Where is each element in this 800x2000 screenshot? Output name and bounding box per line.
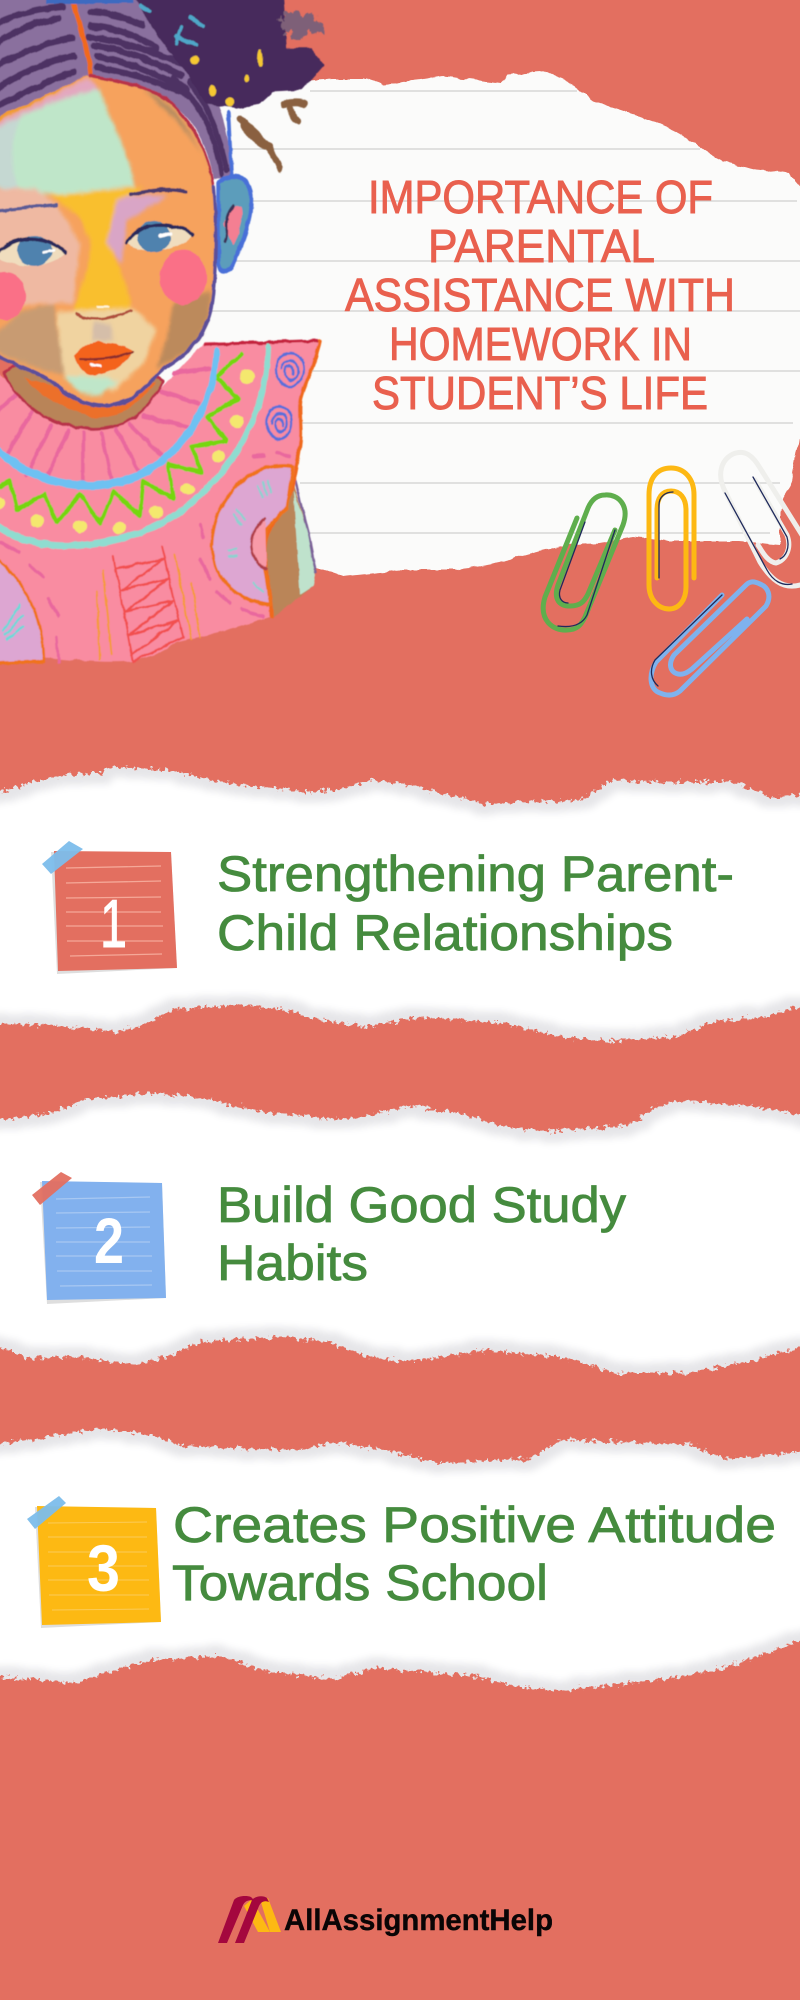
panel: torn strip 3 bbox=[0, 1429, 800, 1691]
panel: torn strip 2 bbox=[0, 1093, 800, 1373]
right clock patch bbox=[212, 465, 293, 605]
sleeve bbox=[260, 473, 316, 618]
ear bbox=[218, 177, 251, 272]
collar rays bbox=[0, 369, 210, 484]
tape bbox=[42, 841, 83, 874]
tape bbox=[32, 1172, 72, 1205]
title: IMPORTANCE OF bbox=[368, 171, 713, 223]
red scribble bbox=[113, 546, 183, 661]
icon: paperclips bbox=[543, 452, 800, 695]
sticky note 1 bbox=[42, 841, 177, 974]
green zigzag bbox=[0, 353, 242, 523]
title bbox=[345, 171, 735, 419]
face paint patches bbox=[0, 77, 211, 396]
lips bbox=[74, 341, 134, 375]
step 2 text bbox=[217, 1177, 626, 1291]
blush bbox=[160, 251, 207, 304]
step 3 text: Creates Positive Attitude bbox=[173, 1497, 776, 1553]
teal arc bbox=[0, 347, 268, 546]
step 3 text: Towards School bbox=[172, 1555, 548, 1611]
orange strokes bbox=[97, 555, 200, 659]
clock ticks bbox=[228, 481, 271, 592]
icon: green paperclip bbox=[543, 495, 625, 630]
number 2: 2 bbox=[94, 1205, 124, 1277]
hair bbox=[0, 0, 232, 178]
face outline bbox=[90, 76, 213, 186]
title: HOMEWORK IN bbox=[389, 318, 692, 370]
icon: blue paperclip bbox=[651, 582, 769, 695]
logo: AllAssignmentHelp bbox=[218, 1896, 553, 1943]
yellow dots bbox=[0, 370, 255, 534]
pink dashes bbox=[0, 453, 290, 661]
logo wordmark: AllAssignmentHelp bbox=[284, 1904, 553, 1937]
illustration: girl portrait bbox=[0, 0, 327, 664]
sticky note 2 bbox=[32, 1172, 166, 1304]
step 1 text bbox=[217, 846, 734, 961]
face bbox=[0, 76, 216, 406]
panel: torn lined paper bbox=[150, 72, 800, 576]
icon: white paperclip bbox=[721, 452, 800, 586]
eyes bbox=[127, 225, 193, 251]
hair bun bbox=[130, 0, 327, 169]
icon: yellow paperclip bbox=[649, 468, 694, 609]
spirals bbox=[266, 353, 304, 439]
title: ASSISTANCE WITH bbox=[345, 269, 735, 321]
step 2 text: Build Good Study bbox=[217, 1177, 626, 1233]
sticky note 3 bbox=[27, 1496, 161, 1628]
logo mark bbox=[218, 1896, 281, 1943]
panel: torn strip 1 bbox=[0, 767, 800, 1041]
hair strands bbox=[0, 7, 227, 173]
left clock patch bbox=[0, 553, 44, 664]
number 3: 3 bbox=[87, 1531, 120, 1605]
neck bbox=[3, 347, 163, 429]
number 1: 1 bbox=[100, 886, 127, 962]
eyebrows bbox=[130, 190, 186, 195]
step 1 text: Child Relationships bbox=[217, 905, 673, 961]
step 3 text bbox=[172, 1497, 776, 1611]
title: PARENTAL bbox=[428, 220, 655, 272]
step 1 text: Strengthening Parent- bbox=[217, 846, 734, 902]
nose bbox=[76, 310, 132, 319]
dress bbox=[0, 340, 320, 662]
step 2 text: Habits bbox=[217, 1235, 368, 1291]
title: STUDENT’S LIFE bbox=[372, 367, 708, 419]
blue arc bbox=[0, 351, 217, 486]
tape bbox=[27, 1496, 66, 1529]
